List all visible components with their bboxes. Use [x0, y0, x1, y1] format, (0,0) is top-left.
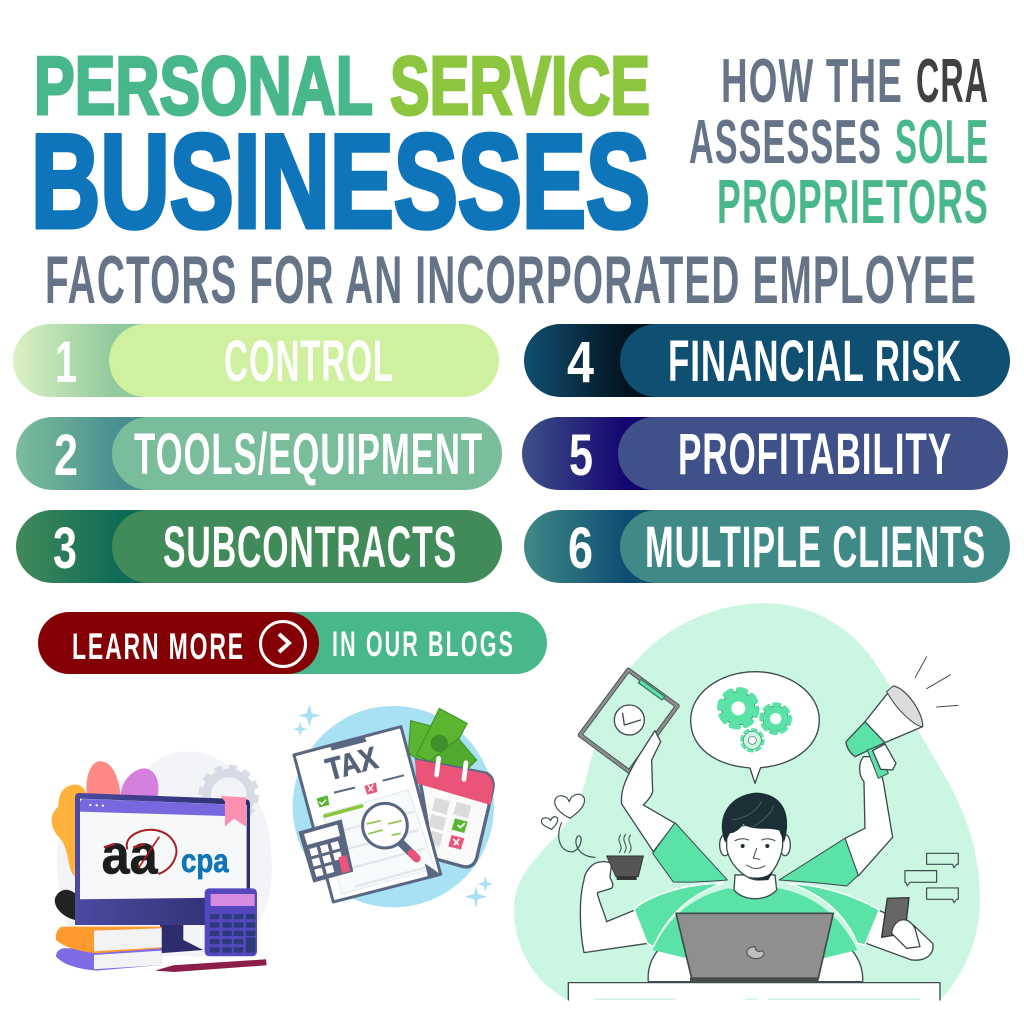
logo: aa cpa — [102, 822, 229, 885]
leaf: pink — [86, 761, 121, 798]
illustration: multitasking person — [514, 603, 980, 1000]
clipboard — [580, 670, 677, 772]
pill 3: subcontracts — [16, 510, 502, 583]
title: personal service businesses — [31, 39, 650, 256]
calculator — [205, 888, 257, 956]
tax paper: TAX — [322, 740, 381, 787]
laptop — [676, 913, 833, 982]
pill 5: profitability — [522, 417, 1008, 490]
pill 6: multiple clients — [524, 510, 1010, 583]
pill 4: financial risk — [524, 324, 1010, 397]
heading word: personal: PERSONAL — [34, 39, 373, 132]
lower arm left with cup — [580, 856, 723, 953]
tax paper — [294, 727, 441, 902]
button: learn more in our blogs — [38, 612, 547, 674]
books — [56, 927, 162, 971]
button: learn more in our blogs: IN OUR BLOGS — [332, 625, 515, 664]
circle backdrop — [293, 706, 494, 907]
subtitle: how the CRA assesses sole proprietors — [689, 47, 989, 237]
leaf: purple — [121, 768, 158, 798]
pencil — [155, 959, 267, 972]
head — [720, 793, 790, 899]
illustration: tax document — [293, 704, 494, 909]
button: learn more in our blogs: LEARN MORE — [72, 626, 245, 667]
pill 5: profitability: 5 — [569, 423, 593, 488]
body — [648, 888, 863, 982]
monitor — [75, 793, 250, 925]
pill 3: subcontracts: SUBCONTRACTS — [163, 515, 457, 580]
lower arm right with phone — [788, 883, 933, 960]
pill 2: tools/equipment — [16, 417, 502, 490]
pill 6: multiple clients: 6 — [568, 516, 593, 581]
logo: aa cpa: aa — [102, 822, 158, 885]
pill 3: subcontracts: 3 — [53, 516, 77, 581]
background blob — [514, 603, 980, 1000]
subtitle line 1: HOW THE — [721, 47, 903, 116]
ribbon — [221, 796, 246, 827]
megaphone — [846, 657, 958, 778]
tax calculator — [298, 819, 353, 883]
leaf: black — [55, 890, 75, 920]
illustration: computer with aa cpa logo — [52, 752, 272, 972]
raised fist — [873, 744, 896, 770]
calendar — [415, 758, 493, 867]
pill 1: control — [13, 324, 499, 397]
pill 2: tools/equipment: TOOLS/EQUIPMENT — [134, 422, 483, 487]
gear — [201, 767, 257, 823]
pill 4: financial risk: 4 — [567, 330, 594, 395]
logo: aa cpa: cpa — [181, 843, 229, 880]
pill 1: control: CONTROL — [224, 329, 394, 394]
raised arm left — [621, 731, 727, 882]
money — [408, 708, 477, 773]
leaf: orange — [52, 785, 88, 877]
sparkles — [293, 704, 493, 909]
magnifier — [363, 803, 417, 858]
desk — [568, 983, 940, 1000]
hearts and curl — [541, 794, 631, 857]
backdrop blob — [57, 752, 272, 957]
monitor stand — [160, 925, 203, 953]
heading word: businesses: BUSINESSES — [31, 108, 650, 256]
pill 2: tools/equipment: 2 — [54, 423, 78, 488]
chat bubbles — [905, 853, 958, 903]
thought bubble with gears — [691, 672, 819, 783]
raised arm right — [779, 757, 893, 886]
heading word: service: SERVICE — [390, 39, 650, 132]
pill 1: control: 1 — [55, 330, 77, 395]
